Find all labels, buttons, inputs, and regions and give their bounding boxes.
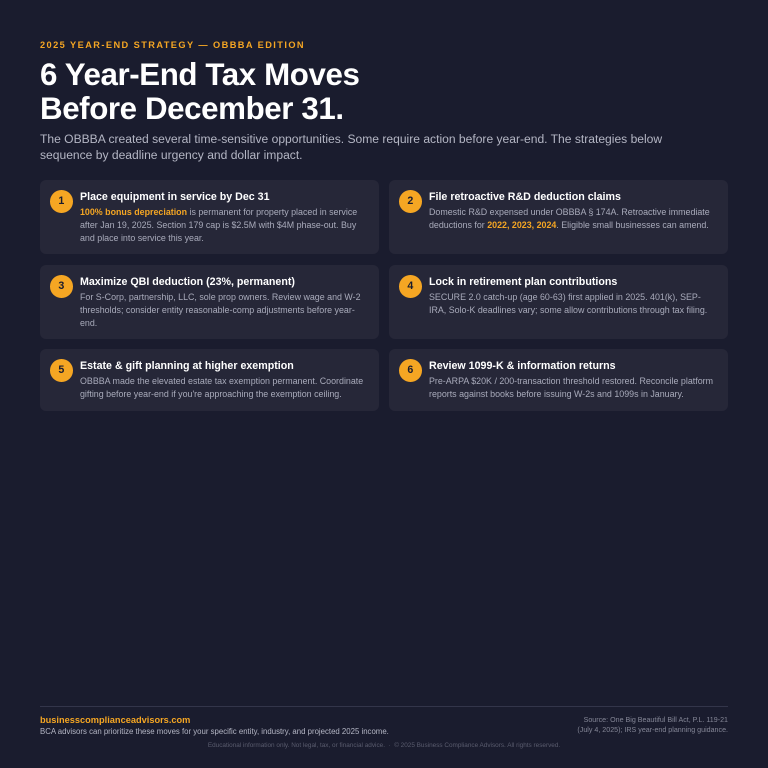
footer website: businesscomplianceadvisors.com <box>40 715 190 725</box>
heading: move 3: Maximize QBI deduction (23%, permanent) <box>80 276 295 288</box>
text: move 1: after Jan 19, 2025. Section 179 cap is $2.5M with $4M phase-out. Buy <box>80 220 356 230</box>
intro text: The OBBBA created several time-sensitive opportunities. Some require action before year-end. The strategies below <box>40 132 662 146</box>
panel: move 1 <box>40 180 379 254</box>
text: move 4: IRA, Solo-K deadlines vary; some allow contributions through tax filing. <box>429 305 707 315</box>
icon: number 2: 2 <box>407 195 413 207</box>
icon: number 3: 3 <box>58 280 64 292</box>
icon: number 4: 4 <box>407 280 413 292</box>
title: Before December 31. <box>40 91 344 126</box>
heading: move 5: Estate & gift planning at higher exemption <box>80 360 294 372</box>
intro text: sequence by deadline urgency and dollar impact. <box>40 148 303 162</box>
text: move 3: end. <box>80 318 97 328</box>
text: move 6 <box>429 376 713 399</box>
panel: move 5 <box>40 349 379 411</box>
text: move 5: gifting before year-end if you're approaching the exemption ceiling. <box>80 389 342 399</box>
panel: move 2 <box>389 180 728 254</box>
title: 6 Year-End Tax Moves <box>40 56 359 92</box>
icon: number 4 <box>399 275 422 298</box>
eyebrow: 2025 YEAR-END STRATEGY — OBBBA EDITION <box>40 40 305 50</box>
text: move 2: Domestic R&D expensed under OBBBA § 174A. Retroactive immediate <box>429 207 710 217</box>
icon: number 2 <box>399 190 422 213</box>
icon: number 1: 1 <box>58 195 64 207</box>
source citation: Source: One Big Beautiful Bill Act, P.L. 119-21 <box>584 716 728 724</box>
legal disclaimer: Educational information only. Not legal, tax, or financial advice. · © 2025 Business Compliance Advisors. All rights reserved. <box>208 742 560 749</box>
footer note: BCA advisors can prioritize these moves for your specific entity, industry, and projected 2025 income. <box>40 727 389 736</box>
icon: number 5: 5 <box>58 364 64 376</box>
source citation: (July 4, 2025); IRS year-end planning guidance. <box>577 726 728 734</box>
text: move 2 <box>429 207 710 230</box>
icon: number 6 <box>399 359 422 382</box>
icon: number 6: 6 <box>407 364 413 376</box>
icon: number 5 <box>50 359 73 382</box>
intro text <box>40 132 662 162</box>
text: move 1: 100% bonus depreciation is permanent for property placed in service <box>80 207 357 217</box>
text: move 3 <box>80 292 361 328</box>
text: move 4 <box>429 292 707 315</box>
heading: move 4: Lock in retirement plan contributions <box>429 276 617 288</box>
source citation <box>577 716 728 734</box>
text: move 6: Pre-ARPA $20K / 200-transaction threshold restored. Reconcile platform <box>429 376 713 386</box>
text: move 6: reports against books before issuing W-2s and 1099s in January. <box>429 389 684 399</box>
icon: number 1 <box>50 190 73 213</box>
text: move 5 <box>80 376 363 399</box>
text: move 1: and place into service this year. <box>80 233 204 243</box>
panel: move 6 <box>389 349 728 411</box>
panel: move 4 <box>389 265 728 339</box>
icon: number 3 <box>50 275 73 298</box>
panel: move 3 <box>40 265 379 339</box>
text: move 1 <box>80 207 357 243</box>
text: move 3: thresholds; consider entity reasonable-comp adjustments before year- <box>80 305 355 315</box>
text: move 5: OBBBA made the elevated estate tax exemption permanent. Coordinate <box>80 376 363 386</box>
heading: move 2: File retroactive R&D deduction claims <box>429 190 621 202</box>
title <box>40 56 359 126</box>
text: move 2: deductions for 2022, 2023, 2024. Eligible small businesses can amend. <box>429 220 709 230</box>
heading: move 6: Review 1099-K & information returns <box>429 360 616 372</box>
text: move 4: SECURE 2.0 catch-up (age 60-63) first applied in 2025. 401(k), SEP- <box>429 292 701 302</box>
heading: move 1: Place equipment in service by Dec 31 <box>80 190 270 202</box>
text: move 3: For S-Corp, partnership, LLC, sole prop owners. Review wage and W-2 <box>80 292 361 302</box>
